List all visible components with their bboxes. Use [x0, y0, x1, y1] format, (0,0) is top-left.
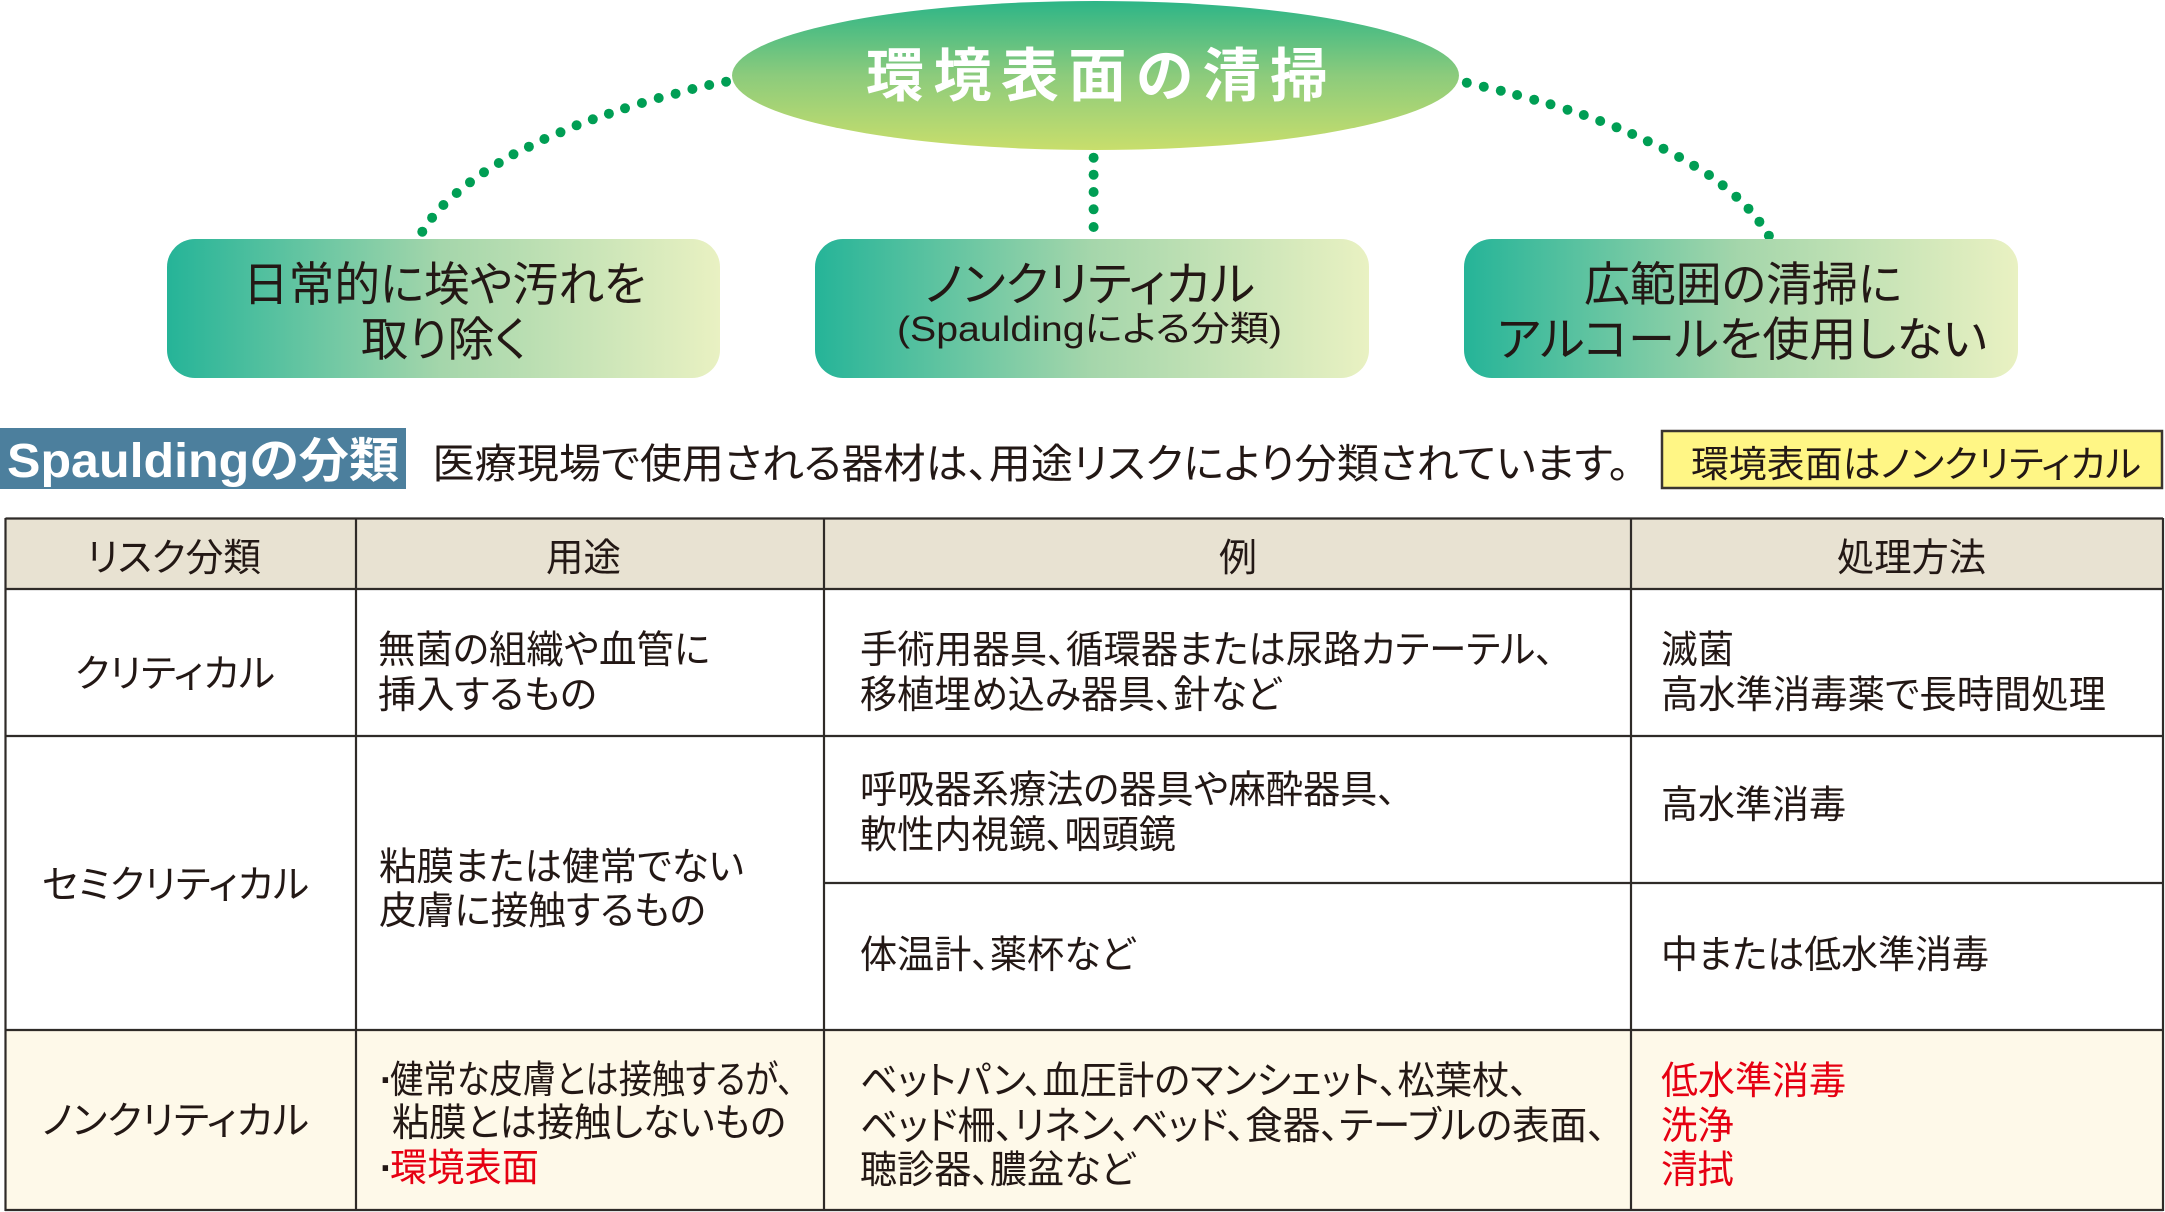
- row: semi-critical: セミクリティカル: [42, 864, 309, 907]
- description text: 医療現場で使用される器材は、用途リスクにより分類されています。: [432, 441, 1630, 487]
- row: semi-critical: 粘膜または健常でない: [379, 846, 744, 889]
- box: no alcohol for wide areas: 広範囲の清掃に: [1584, 258, 1902, 311]
- header row: リスク分類: [87, 537, 261, 580]
- row: noncritical: [5, 1030, 2163, 1210]
- row: semi-critical: 皮膚に接触するもの: [379, 890, 706, 933]
- row: critical: 無菌の組織や血管に: [378, 629, 710, 672]
- connector: dotted line to center box: [1089, 153, 1099, 232]
- row: critical: 挿入するもの: [378, 674, 597, 717]
- row: noncritical: ·: [380, 1147, 393, 1190]
- row: noncritical: 洗浄: [1661, 1105, 1734, 1148]
- row: noncritical: ノンクリティカル: [42, 1100, 309, 1143]
- row: semi-critical: 中または低水準消毒: [1661, 934, 1989, 977]
- box: daily dust removal: [167, 239, 720, 378]
- title ellipse: 環境表面の清掃: [866, 44, 1328, 109]
- row: noncritical: 低水準消毒: [1661, 1060, 1846, 1103]
- callout: environmental surfaces are noncritical: 環境表面はノンクリティカル: [1691, 444, 2141, 485]
- row: noncritical: 聴診器、膿盆など: [860, 1149, 1137, 1192]
- header row: [5, 518, 2163, 589]
- row: semi-critical: [42, 769, 1989, 977]
- row: semi-critical: 高水準消毒: [1661, 784, 1846, 827]
- table: Spaulding classification: [5, 518, 2163, 1211]
- box: noncritical: (Spauldingによる分類): [897, 310, 1282, 349]
- row: noncritical: ベッド柵、リネン、ベッド、食器、テーブルの表面、: [860, 1105, 1606, 1148]
- connector: dotted arc to right box: [1462, 78, 1774, 241]
- box: daily dust removal: 日常的に埃や汚れを: [243, 258, 646, 311]
- connector: dotted arc to left box: [417, 77, 731, 237]
- box: noncritical: [815, 239, 1369, 378]
- box: no alcohol for wide areas: [1464, 239, 2018, 378]
- callout: environmental surfaces are noncritical: [1662, 431, 2162, 488]
- row: critical: [75, 629, 2106, 717]
- row: critical: 移植埋め込み器具、針など: [860, 674, 1283, 717]
- row: semi-critical: 軟性内視鏡、咽頭鏡: [860, 814, 1176, 857]
- box: daily dust removal: 取り除く: [361, 313, 527, 366]
- row: critical: クリティカル: [75, 653, 275, 696]
- row: critical: 高水準消毒薬で長時間処理: [1661, 674, 2106, 717]
- title ellipse: [732, 1, 1459, 150]
- row: noncritical: 環境表面: [390, 1147, 539, 1190]
- row: noncritical: ·: [380, 1059, 393, 1102]
- header row: 用途: [546, 537, 621, 580]
- row: noncritical: 健常な皮膚とは接触するが、: [390, 1059, 794, 1102]
- box: noncritical: ノンクリティカル: [925, 258, 1255, 311]
- row: critical: 滅菌: [1661, 629, 1734, 672]
- header row: 例: [1219, 537, 1257, 580]
- row: noncritical: 粘膜とは接触しないもの: [392, 1102, 786, 1145]
- row: critical: 手術用器具、循環器または尿路カテーテル、: [860, 629, 1554, 672]
- row: noncritical: 清拭: [1661, 1149, 1734, 1192]
- section heading: Spaulding classification: Spauldingの分類: [7, 435, 399, 488]
- box: no alcohol for wide areas: アルコールを使用しない: [1497, 313, 1987, 366]
- row: noncritical: ベットパン、血圧計のマンシェット、松葉杖、: [860, 1060, 1528, 1103]
- row: semi-critical: 体温計、薬杯など: [860, 934, 1137, 977]
- row: semi-critical: 呼吸器系療法の器具や麻酔器具、: [860, 769, 1396, 812]
- header row: 処理方法: [1837, 537, 1986, 580]
